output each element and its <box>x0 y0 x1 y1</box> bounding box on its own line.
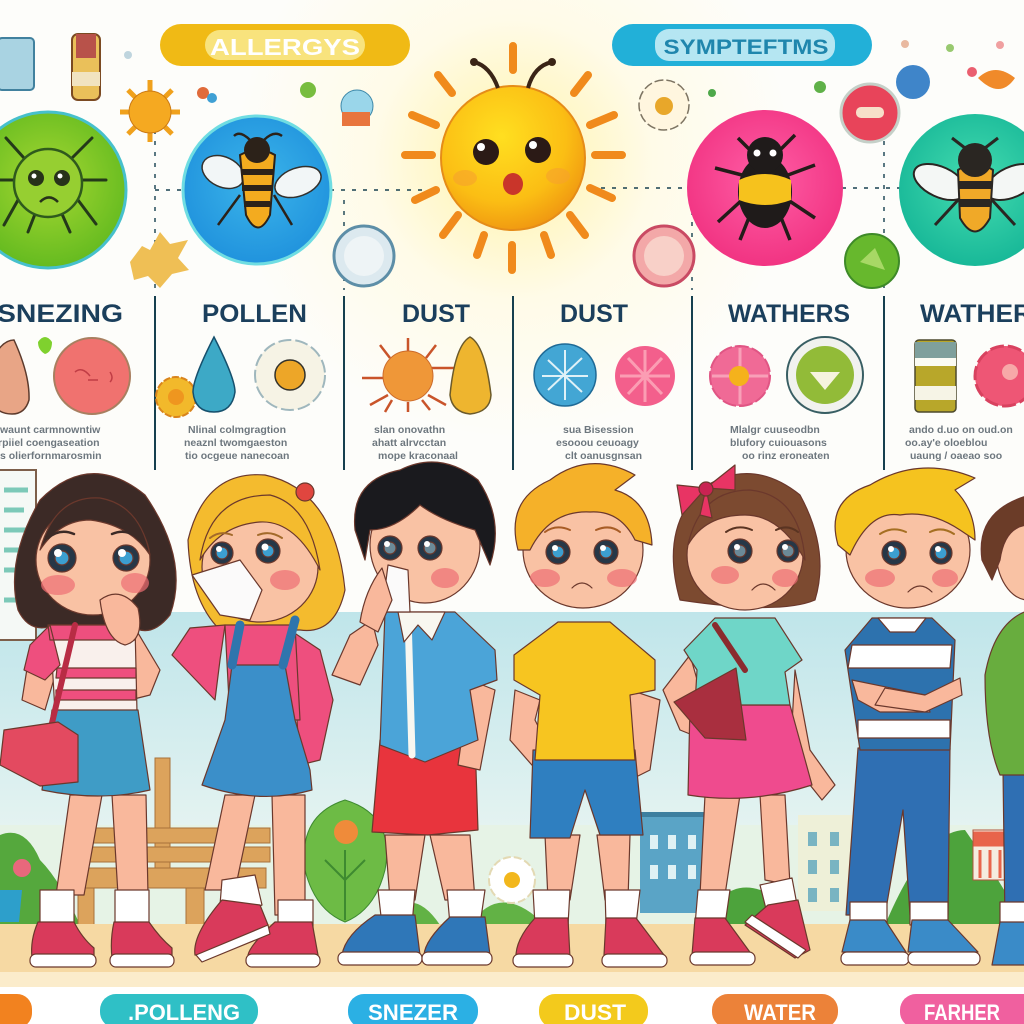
tree <box>304 800 387 922</box>
child 5: girl with bow and handbag <box>663 465 835 965</box>
child 2: blonde girl with tissue <box>172 475 345 967</box>
icon: small sun <box>120 80 180 142</box>
dividers <box>155 296 884 470</box>
icon: confetti left <box>124 51 316 103</box>
potted plant <box>0 859 31 922</box>
icon: confetti right <box>708 40 1004 97</box>
bottom pill: orange fragment <box>0 994 32 1024</box>
panel: dust second <box>534 300 675 462</box>
building: cream <box>798 815 856 911</box>
icon: pink disc <box>634 226 694 286</box>
bottom pill: dust <box>539 994 648 1024</box>
heading: POLLEN <box>202 300 307 328</box>
body text: slan onovathn <box>374 424 445 436</box>
body text <box>0 424 102 462</box>
body text: oo.ay'e oloeblou <box>905 437 987 449</box>
icon: orange fish <box>978 70 1015 89</box>
panel: dust <box>362 300 491 462</box>
child 7: partial boy at right edge <box>981 495 1024 965</box>
body text: blufory cuiouasons <box>730 437 827 449</box>
icon: spiky sun <box>362 338 454 412</box>
child 1: girl with bag <box>0 474 176 967</box>
child 6: boy with crossed arms <box>835 468 980 965</box>
body text: neaznl twomgaeston <box>184 437 287 449</box>
bottom pill: polleng <box>100 994 258 1024</box>
title pill: symptoms: SYMPTEFTMS <box>664 36 828 59</box>
body text <box>556 424 642 462</box>
panel: sneezing <box>0 300 130 462</box>
child 3: boy in blue shirt <box>332 462 497 965</box>
kiosk <box>973 830 1007 880</box>
body text: Mlalgr cuuseodbn <box>730 424 820 436</box>
body text: tio ocgeue nanecoan <box>185 450 289 462</box>
icon: pink flower <box>710 346 770 406</box>
icon: bottle <box>72 34 100 100</box>
connector dashes <box>155 130 900 290</box>
title pill: symptoms <box>612 24 872 66</box>
icon: daisy <box>255 340 325 410</box>
bottom pill: water <box>712 994 838 1024</box>
body text: s olierfornmarosmin <box>0 450 102 462</box>
ground <box>0 924 1024 987</box>
icon: pink flower <box>615 346 675 406</box>
icon: pink beetle circle <box>687 110 843 266</box>
body text: ahatt alrvcctan <box>372 437 446 449</box>
icon: pale blue disc <box>334 226 394 286</box>
upper chart background with sun glow <box>0 0 1024 612</box>
body text <box>905 424 1013 462</box>
icon: daisy badge <box>639 80 689 130</box>
body text: rpiiel coengaseation <box>0 437 100 449</box>
icon: yellow splash <box>130 232 189 288</box>
body text: mope kraconaal <box>378 450 458 462</box>
icon: green mite circle <box>0 112 126 268</box>
body text: waunt carmnowntiw <box>0 424 101 436</box>
body text: ando d.uo on oud.on <box>909 424 1013 436</box>
panel: wather <box>905 300 1024 462</box>
bench <box>70 758 270 930</box>
body text: Nlinal colmgragtion <box>188 424 286 436</box>
body text: uaung / oaeao soo <box>910 450 1002 462</box>
heading: WATHER <box>920 300 1024 328</box>
icon: green disc <box>845 234 899 288</box>
heading: SNEZING <box>0 300 123 328</box>
icon: nose capsule <box>0 340 29 414</box>
heading: WATHERS <box>728 300 850 328</box>
body text: clt oanusgnsan <box>565 450 642 462</box>
icon: yellow cone <box>450 337 491 414</box>
icon: red pill badge <box>841 84 899 142</box>
icon: blue bee circle <box>183 116 331 264</box>
building: blue <box>640 812 710 913</box>
icon: pink face badge <box>54 338 130 414</box>
bottom pill: farher <box>900 994 1024 1024</box>
flower: daisy in park <box>489 857 535 903</box>
chart board at left <box>0 470 36 640</box>
title pill: allergys <box>160 24 410 66</box>
body text <box>372 424 458 462</box>
body text <box>730 424 830 462</box>
body text <box>184 424 289 462</box>
icon: red flower <box>975 346 1024 406</box>
icon: yellow flower <box>156 377 196 417</box>
icon: teal fly circle <box>899 114 1024 266</box>
bottom pill: snezer <box>348 994 478 1024</box>
icon: blue star disc <box>534 344 596 406</box>
body text: oo rinz eroneaten <box>742 450 830 462</box>
heading: DUST <box>560 300 628 328</box>
panel: wathers <box>710 300 863 462</box>
panel: pollen <box>156 300 325 462</box>
icon: jar <box>915 340 956 412</box>
park background <box>0 612 1024 930</box>
small icons around the top <box>0 34 1015 288</box>
title pill: allergys: ALLERGYS <box>210 34 360 60</box>
sun character <box>405 46 622 270</box>
icon: blue box <box>0 38 34 90</box>
icon: blue dot <box>896 65 930 99</box>
icon: water drop <box>193 337 235 412</box>
icon: tag <box>341 90 373 126</box>
child 4: boy in yellow shirt <box>510 464 667 967</box>
heading: DUST <box>402 300 470 328</box>
body text: esooou ceuoagy <box>556 437 639 449</box>
icon: green leaf <box>38 337 52 354</box>
body text: sua Bisession <box>563 424 634 436</box>
icon: green plate <box>787 337 863 413</box>
